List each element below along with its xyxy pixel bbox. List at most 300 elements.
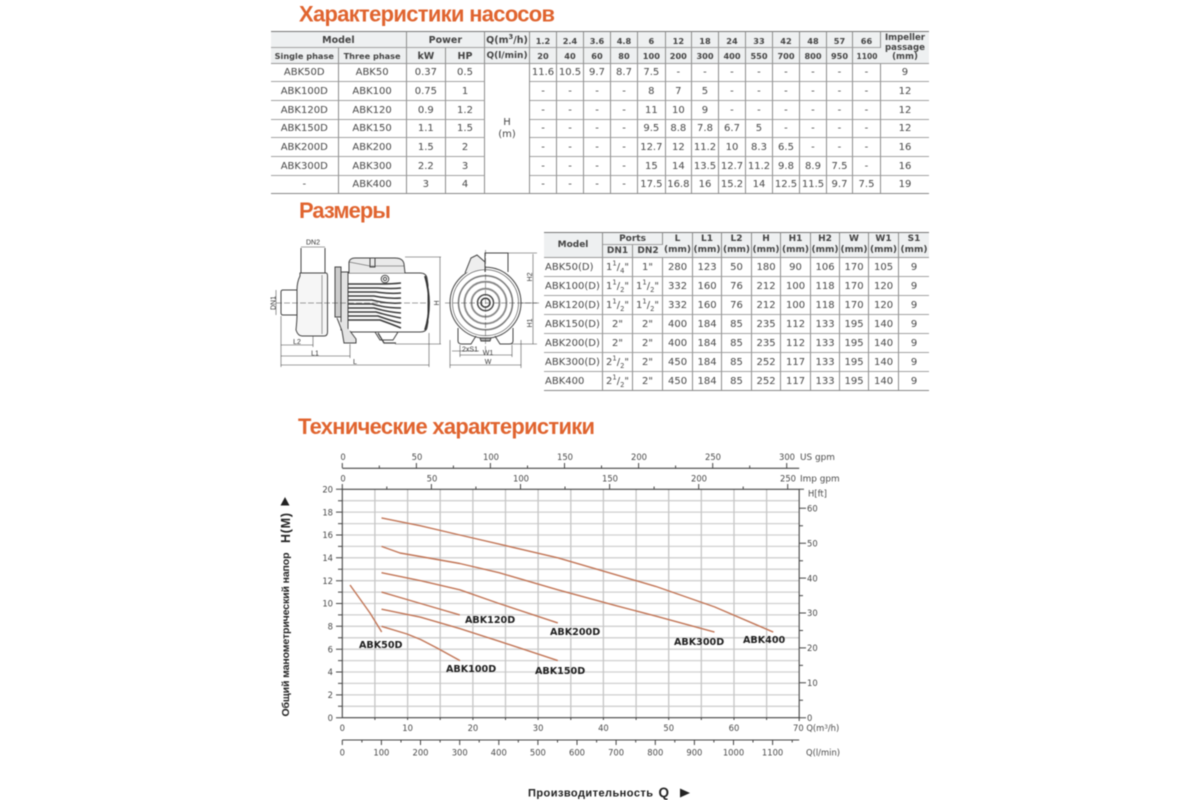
row: ABK50D: 0.5 bbox=[457, 67, 473, 78]
left axis labels: head in metres bbox=[322, 484, 333, 723]
bottom axis: Q m3/h: 30 bbox=[533, 723, 543, 733]
row: ABK100D: - bbox=[811, 86, 815, 97]
row: ABK100D: 12 bbox=[899, 86, 911, 97]
row: ABK200(D): 140 bbox=[874, 338, 893, 349]
row: ABK400: 4 bbox=[462, 179, 468, 190]
row: ABK300D: 8.9 bbox=[805, 161, 821, 172]
header row: ports and sizes: Ports bbox=[619, 234, 646, 244]
row: ABK300(D): 252 bbox=[756, 356, 776, 368]
left axis labels: head in metres: 14 bbox=[322, 553, 333, 563]
row: ABK100(D): 120 bbox=[874, 281, 893, 292]
left axis labels: head in metres: 6 bbox=[328, 644, 333, 654]
row: ABK200(D): 112 bbox=[786, 338, 805, 349]
row: ABK100D: - bbox=[784, 86, 788, 97]
header row: flow l/min: HP bbox=[458, 51, 472, 62]
row: ABK100(D): 170 bbox=[844, 281, 864, 292]
header row: ports and sizes: (mm) bbox=[723, 245, 750, 255]
row: ABK200D: 10 bbox=[726, 142, 738, 153]
row: ABK50D: - bbox=[730, 67, 734, 78]
header row: flow m3/h: 6 bbox=[648, 36, 654, 46]
y axis title: Общий манометрический напор bbox=[280, 552, 292, 716]
row: ABK200(D): 133 bbox=[815, 338, 835, 349]
bottom axis: Q l/min: 1000 bbox=[723, 748, 744, 758]
row: ABK200D bbox=[270, 138, 930, 158]
row: ABK120D: 10 bbox=[672, 105, 685, 116]
header row: flow m3/h: H bbox=[503, 117, 511, 128]
row: ABK200(D): 9 bbox=[911, 338, 917, 349]
bottom axis: Q l/min bbox=[340, 748, 840, 758]
header row: DN1 and DN2 bbox=[602, 244, 664, 259]
header row: flow l/min: 200 bbox=[670, 51, 687, 61]
header row: ports and sizes: W1 bbox=[875, 234, 892, 244]
row: ABK100D: - bbox=[838, 86, 841, 97]
row: ABK300D: 7.5 bbox=[832, 161, 847, 172]
bottom axis: Q m3/h: 70 Q(m bbox=[793, 723, 824, 733]
header row: flow l/min: 1100 bbox=[857, 52, 877, 61]
row: ABK50D: ABK50 bbox=[356, 67, 389, 78]
top axis: Imp gpm: 50 bbox=[427, 474, 437, 484]
row: ABK50(D): 50 bbox=[730, 262, 743, 273]
row: ABK200D: - bbox=[865, 142, 868, 153]
header row: flow l/min: 800 bbox=[804, 51, 822, 61]
row: ABK150D: 9.5 bbox=[643, 123, 659, 134]
row: ABK50(D): 180 bbox=[756, 262, 776, 273]
row: ABK50(D) bbox=[544, 258, 930, 278]
x axis title bbox=[528, 785, 690, 800]
top axis: Imp gpm: 0 bbox=[340, 474, 346, 484]
row: ABK100(D) bbox=[544, 276, 930, 297]
row: ABK50D: 0.37 bbox=[415, 67, 437, 78]
header row: flow m3/h: 33 bbox=[753, 36, 765, 46]
row: ABK100D: - bbox=[865, 86, 868, 97]
row: ABK50D: - bbox=[811, 67, 815, 78]
row: ABK150D: - bbox=[838, 123, 841, 134]
table: pump performance bbox=[270, 30, 930, 195]
header row: ports and sizes: L1 bbox=[701, 234, 713, 244]
row: ABK150D: - bbox=[541, 123, 545, 134]
row: ABK300(D): 9 bbox=[911, 356, 917, 368]
row: ABK100(D): 212 bbox=[756, 281, 776, 292]
row: ABK150(D) bbox=[544, 314, 930, 335]
row: ABK100D: - bbox=[622, 86, 626, 97]
header row: ports and sizes: W bbox=[849, 234, 859, 244]
row: ABK120(D): 212 bbox=[756, 300, 776, 311]
header row: flow l/min: 80 bbox=[618, 51, 630, 61]
row: ABK50D: 8.7 bbox=[616, 67, 632, 78]
row: ABK400: 14 bbox=[753, 179, 765, 190]
bottom axis: Q l/min: 1100 bbox=[762, 748, 783, 758]
row: ABK50(D): 170 bbox=[844, 262, 864, 273]
side view of pump: DN2 bbox=[306, 240, 320, 246]
header row: ports and sizes: (mm) bbox=[753, 245, 780, 255]
left axis labels: head in metres: 8 bbox=[328, 622, 333, 632]
header row: ports and sizes: (mm) bbox=[782, 245, 809, 255]
row: ABK300(D): 133 bbox=[815, 356, 835, 368]
row: ABK120(D): 120 bbox=[874, 300, 893, 311]
row: ABK150(D): 2" bbox=[642, 319, 653, 330]
top axis: Imp gpm bbox=[340, 474, 840, 484]
top axis: Imp gpm: 250 bbox=[780, 474, 796, 484]
row: ABK120(D): 76 bbox=[730, 300, 743, 311]
row: ABK100(D): 118 bbox=[815, 281, 835, 292]
row: ABK150(D): 235 bbox=[756, 319, 776, 330]
row: ABK400 bbox=[544, 372, 930, 392]
row: ABK400: - bbox=[622, 179, 626, 190]
row: ABK400: 117 bbox=[786, 376, 805, 386]
row: ABK400: 21/2" bbox=[606, 373, 629, 388]
row: ABK400: 450 bbox=[668, 376, 687, 386]
axes and ticks bbox=[336, 463, 806, 745]
row: ABK50D: 7.5 bbox=[643, 67, 659, 78]
header row: ports and sizes: (mm) bbox=[812, 245, 838, 255]
row: ABK150D: - bbox=[568, 123, 572, 134]
curve labels: ABK50D bbox=[359, 640, 403, 651]
row: ABK120(D): 11/2" bbox=[606, 298, 629, 313]
row: ABK300(D): 195 bbox=[844, 356, 864, 368]
bottom axis: Q l/min: 400 bbox=[491, 748, 507, 758]
row: ABK100(D): 100 bbox=[786, 281, 805, 292]
header row: flow l/min: 60 bbox=[591, 51, 603, 61]
left axis labels: head in metres: 18 bbox=[322, 508, 333, 518]
row: ABK150D: 7.8 bbox=[697, 123, 713, 134]
grid bbox=[342, 489, 799, 718]
header row: flow m3/h: 66 bbox=[861, 36, 872, 46]
row: ABK100D: 1 bbox=[462, 86, 468, 97]
bottom axis: Q l/min: 900 bbox=[686, 748, 702, 758]
left axis labels: head in metres: 2 bbox=[328, 690, 333, 700]
row: ABK50(D): 90 bbox=[789, 262, 802, 273]
left axis labels: head in metres: 20 bbox=[322, 484, 333, 494]
row: ABK50(D): ABK50(D) bbox=[545, 262, 594, 273]
y axis title: H(M) bbox=[279, 513, 293, 543]
row: ABK300D: 9.8 bbox=[778, 161, 794, 172]
x axis title: Q bbox=[658, 785, 669, 800]
right axis labels: head in feet: 0 bbox=[807, 713, 812, 723]
header row: flow m3/h: Power bbox=[429, 35, 462, 46]
row: ABK120(D): 11/2" bbox=[636, 298, 659, 313]
bottom axis: Q l/min: 300 bbox=[452, 748, 468, 758]
row: ABK100D: ABK100D bbox=[281, 86, 328, 97]
row: ABK200(D): 184 bbox=[697, 338, 717, 349]
curve labels: ABK120D bbox=[465, 615, 515, 626]
row: ABK100D: - bbox=[730, 86, 734, 97]
header row: flow m3/h: 3.6 bbox=[590, 36, 604, 46]
row: ABK150(D): 2" bbox=[612, 319, 623, 330]
y axis title bbox=[279, 497, 293, 716]
header row: flow m3/h: 42 bbox=[780, 36, 792, 46]
row: ABK100(D): 76 bbox=[730, 281, 743, 292]
bottom axis: Q l/min: 600 bbox=[569, 748, 585, 758]
top axis: US gpm: US gpm bbox=[800, 453, 835, 463]
row: ABK100(D): 332 bbox=[668, 281, 687, 292]
row: ABK120(D) bbox=[544, 296, 930, 316]
row: ABK300D: - bbox=[595, 161, 599, 172]
header row: ports and sizes: (mm) bbox=[694, 245, 720, 255]
table: pump dimensions bbox=[544, 231, 930, 392]
top axis: US gpm: 250 bbox=[705, 452, 721, 462]
row: ABK400 bbox=[270, 176, 930, 195]
row: ABK150(D): 112 bbox=[786, 319, 805, 330]
row: ABK120D: - bbox=[865, 105, 868, 116]
row: ABK50D: 9.7 bbox=[589, 67, 605, 78]
row: ABK400: 3 bbox=[423, 179, 429, 190]
row: ABK100D: ABK100 bbox=[352, 86, 392, 97]
header row: ports and sizes: L bbox=[675, 234, 680, 244]
bottom axis: Q l/min: 700 bbox=[608, 748, 624, 758]
left axis labels: head in metres: 12 bbox=[322, 576, 333, 586]
row: ABK400: 133 bbox=[815, 376, 835, 386]
curve labels: ABK100D bbox=[446, 664, 496, 675]
row: ABK300D bbox=[270, 156, 930, 177]
row: ABK200D: - bbox=[595, 142, 599, 153]
header row: flow l/min: Single phase bbox=[275, 51, 334, 61]
bottom axis: Q m3/h: 3 bbox=[824, 724, 828, 730]
title: technical characteristics: Технические характеристики bbox=[298, 414, 595, 439]
row: ABK150(D): ABK150(D) bbox=[545, 319, 600, 330]
curve labels bbox=[359, 615, 786, 677]
header row: flow l/min: 550 bbox=[750, 51, 768, 61]
row: ABK200(D): 235 bbox=[756, 338, 776, 349]
row: ABK300D: 13.5 bbox=[694, 161, 716, 172]
row: ABK200(D): ABK200(D) bbox=[545, 338, 600, 349]
row: ABK400: - bbox=[302, 179, 306, 190]
header row: flow m3/h: 18 bbox=[699, 36, 711, 46]
row: ABK50D bbox=[270, 64, 930, 195]
row: ABK150(D): 400 bbox=[668, 319, 687, 330]
header row: ports and sizes: Model bbox=[558, 240, 588, 250]
row: ABK120D: 0.9 bbox=[418, 105, 434, 116]
header row: flow l/min: 700 bbox=[777, 51, 795, 61]
bottom axis: Q l/min: 500 bbox=[530, 748, 546, 758]
header row: flow l/min: Three phase bbox=[344, 51, 401, 61]
row: ABK120(D): 9 bbox=[911, 300, 917, 311]
row: ABK150D bbox=[270, 120, 930, 139]
row: ABK150D: 1.1 bbox=[418, 123, 434, 134]
top axis: US gpm: 0 bbox=[340, 452, 346, 462]
row: ABK300D: 2.2 bbox=[418, 161, 434, 172]
curve labels: ABK200D bbox=[550, 627, 600, 638]
header row: ports and sizes: (mm) bbox=[901, 245, 928, 255]
row: ABK120D: - bbox=[784, 105, 788, 116]
header row: ports and sizes: (mm) bbox=[841, 245, 868, 255]
row: ABK150D: 12 bbox=[899, 123, 911, 134]
header row: flow m3/h: (m) bbox=[498, 129, 516, 140]
row: ABK150D: 6.7 bbox=[724, 123, 740, 134]
header row: ports and sizes: H1 bbox=[789, 234, 802, 244]
dimension lines bbox=[276, 247, 441, 367]
row: ABK120(D): 332 bbox=[668, 300, 687, 311]
row: ABK400: 9.7 bbox=[832, 179, 847, 190]
row: ABK200(D): 2" bbox=[612, 338, 623, 349]
row: ABK50(D): 106 bbox=[815, 262, 835, 273]
left axis labels: head in metres: 16 bbox=[322, 530, 333, 540]
row: ABK400: 15.2 bbox=[721, 179, 743, 190]
side view of pump: DN1 bbox=[270, 296, 278, 310]
row: ABK120D: 1.2 bbox=[457, 105, 473, 116]
row: ABK200(D): 400 bbox=[668, 338, 687, 349]
header row: ports and sizes: H2 bbox=[818, 234, 832, 244]
bottom axis: Q l/min: 200 bbox=[412, 748, 428, 758]
row: ABK300D: 15 bbox=[645, 161, 658, 172]
header row: flow l/min: 40 bbox=[564, 51, 576, 61]
row: ABK200D: 8.3 bbox=[751, 142, 767, 153]
row: ABK50D: ABK50D bbox=[284, 67, 325, 78]
row: ABK150D: - bbox=[595, 123, 599, 134]
header row: flow l/min: 950 bbox=[831, 51, 848, 61]
row: ABK200(D): 2" bbox=[642, 338, 653, 349]
row: ABK200D: 12.7 bbox=[640, 142, 662, 153]
row: ABK50D: 11.6 bbox=[532, 67, 554, 78]
row: ABK400: 16 bbox=[699, 179, 711, 190]
bottom axis: Q m3/h: 0 bbox=[340, 723, 345, 733]
row: ABK300(D): 2" bbox=[642, 356, 653, 368]
header row: flow m3/h: 2.4 bbox=[563, 36, 577, 46]
header row: flow m3/h: 24 bbox=[726, 36, 738, 46]
front view of pump: H2 bbox=[527, 272, 534, 281]
top axis: US gpm: 300 bbox=[779, 452, 795, 462]
row: ABK300D: 16 bbox=[899, 161, 911, 172]
row: ABK400: 12.5 bbox=[775, 179, 797, 190]
row: ABK150D: - bbox=[865, 123, 868, 134]
row: ABK100(D): 11/2" bbox=[636, 279, 659, 294]
curve labels: ABK400 bbox=[743, 635, 786, 646]
header row: DN1 and DN2: DN2 bbox=[637, 246, 659, 256]
row: ABK150(D): 195 bbox=[844, 319, 864, 330]
row: ABK100D: 8 bbox=[648, 86, 655, 97]
row: ABK300(D): 184 bbox=[697, 356, 717, 368]
front view of pump: H1 bbox=[527, 318, 534, 327]
front view of pump: 2xS1 bbox=[462, 346, 478, 354]
header row: flow l/min: kW bbox=[417, 51, 434, 62]
row: ABK50D: - bbox=[703, 67, 707, 78]
row: ABK120D: - bbox=[811, 105, 815, 116]
row: ABK400: - bbox=[541, 179, 545, 190]
row: ABK200D: - bbox=[568, 142, 572, 153]
header row: ports and sizes: H bbox=[762, 234, 770, 244]
row: ABK400: 16.8 bbox=[667, 179, 689, 190]
header row: flow m3/h: Model bbox=[322, 35, 355, 46]
bottom axis: Q m3/h: 20 bbox=[468, 723, 478, 733]
row: ABK200D: ABK200 bbox=[352, 142, 392, 153]
row: ABK200D: - bbox=[541, 142, 545, 153]
bottom axis: Q l/min: 0 bbox=[340, 748, 345, 758]
bottom axis: Q m3/h: 10 bbox=[402, 723, 413, 733]
row: ABK150D: - bbox=[811, 123, 815, 134]
row: ABK300D: 3 bbox=[462, 161, 468, 172]
row: ABK120D: 11 bbox=[645, 105, 658, 116]
top axis: Imp gpm: 150 bbox=[602, 474, 618, 484]
row: ABK100D: 0.75 bbox=[415, 86, 437, 97]
row: ABK200(D): 85 bbox=[730, 338, 743, 349]
row: ABK200D: - bbox=[838, 142, 841, 153]
row: ABK200D: 12 bbox=[672, 142, 685, 153]
header row: ports and sizes: S1 bbox=[908, 234, 920, 244]
row: ABK400: 85 bbox=[730, 376, 743, 386]
row: ABK400: - bbox=[568, 179, 572, 190]
row: ABK120D bbox=[270, 100, 930, 121]
row: ABK200D: ABK200D bbox=[281, 142, 328, 153]
row: ABK400: 252 bbox=[756, 376, 776, 386]
row: ABK400: 140 bbox=[874, 376, 893, 386]
row: ABK120(D): 118 bbox=[815, 300, 835, 311]
row: ABK300(D): 450 bbox=[668, 356, 687, 368]
row: ABK100D: - bbox=[568, 86, 572, 97]
row: ABK300(D): 140 bbox=[874, 356, 893, 368]
front view of pump: W bbox=[485, 359, 492, 366]
row: ABK120D: - bbox=[568, 105, 572, 116]
top axis: Imp gpm: Imp gpm bbox=[800, 474, 840, 484]
top axis: US gpm bbox=[340, 452, 835, 463]
row: ABK150D: - bbox=[784, 123, 788, 134]
right axis labels: head in feet: 60 bbox=[807, 504, 818, 514]
right axis labels: head in feet: 30 bbox=[807, 608, 818, 618]
bottom axis: Q m3/h: 40 bbox=[598, 723, 609, 733]
row: ABK120D: ABK120D bbox=[281, 105, 328, 116]
row: ABK200D: 11.2 bbox=[694, 142, 716, 153]
row: ABK50(D): 9 bbox=[911, 262, 917, 273]
header row: DN1 and DN2: DN1 bbox=[607, 246, 628, 256]
row: ABK150D: 1.5 bbox=[457, 123, 473, 134]
header row: flow m3/h: (mm) bbox=[892, 52, 918, 62]
header row: flow m3/h: 4.8 bbox=[617, 36, 631, 46]
row: ABK300D: - bbox=[568, 161, 572, 172]
row: ABK300(D): ABK300(D) bbox=[545, 356, 600, 368]
header row: ports and sizes bbox=[544, 231, 930, 392]
x axis title: Производительность bbox=[528, 788, 653, 800]
top axis: Imp gpm: 200 bbox=[691, 474, 707, 484]
row: ABK400: 2" bbox=[642, 376, 653, 386]
header row: flow m3/h: 48 bbox=[807, 36, 819, 46]
row: ABK200D: 2 bbox=[462, 142, 468, 153]
right axis labels: head in feet: 10 bbox=[807, 678, 818, 688]
right axis labels: head in feet: H[ft] bbox=[808, 488, 827, 498]
row: ABK300(D) bbox=[544, 352, 930, 373]
row: ABK50D: - bbox=[838, 67, 841, 78]
left axis labels: head in metres: 4 bbox=[328, 667, 333, 677]
header row: flow m3/h: 57 bbox=[834, 36, 845, 46]
header row: flow m3/h: 1.2 bbox=[536, 36, 550, 46]
bottom axis: Q m3/h: /h) bbox=[828, 723, 839, 733]
row: ABK50(D): 105 bbox=[874, 262, 893, 273]
row: ABK150(D): 133 bbox=[815, 319, 835, 330]
row: ABK400: 11.5 bbox=[802, 179, 824, 190]
header row: ports and sizes: (mm) bbox=[664, 245, 691, 255]
row: ABK120(D): ABK120(D) bbox=[545, 300, 600, 311]
row: ABK300D: - bbox=[865, 161, 868, 172]
row: ABK120D: - bbox=[622, 105, 626, 116]
row: ABK120D: 12 bbox=[899, 105, 911, 116]
row: ABK200D: 16 bbox=[899, 142, 911, 153]
row: ABK150(D): 140 bbox=[874, 319, 893, 330]
header row: flow l/min: 400 bbox=[723, 51, 741, 61]
left axis labels: head in metres: 0 bbox=[328, 713, 333, 723]
side view of pump: L2 bbox=[293, 339, 301, 346]
row: ABK120(D): 100 bbox=[786, 300, 805, 311]
row: ABK50D: - bbox=[865, 67, 868, 78]
header row: flow l/min: 100 bbox=[643, 51, 660, 61]
row: ABK100(D): 160 bbox=[697, 281, 717, 292]
row: ABK50D: - bbox=[677, 67, 680, 78]
row: ABK100(D): 11/2" bbox=[606, 279, 629, 294]
top axis: US gpm: 50 bbox=[412, 452, 422, 462]
title: pump characteristics: Характеристики насосов bbox=[299, 2, 555, 26]
bottom axis: Q m3/h: 50 bbox=[663, 723, 674, 733]
row: ABK200(D) bbox=[544, 334, 930, 354]
dimension lines bbox=[450, 253, 537, 368]
bottom axis: Q m3/h: 60 bbox=[729, 723, 739, 733]
row: ABK300D: 14 bbox=[672, 161, 685, 172]
row: ABK150D: ABK150 bbox=[352, 123, 392, 134]
